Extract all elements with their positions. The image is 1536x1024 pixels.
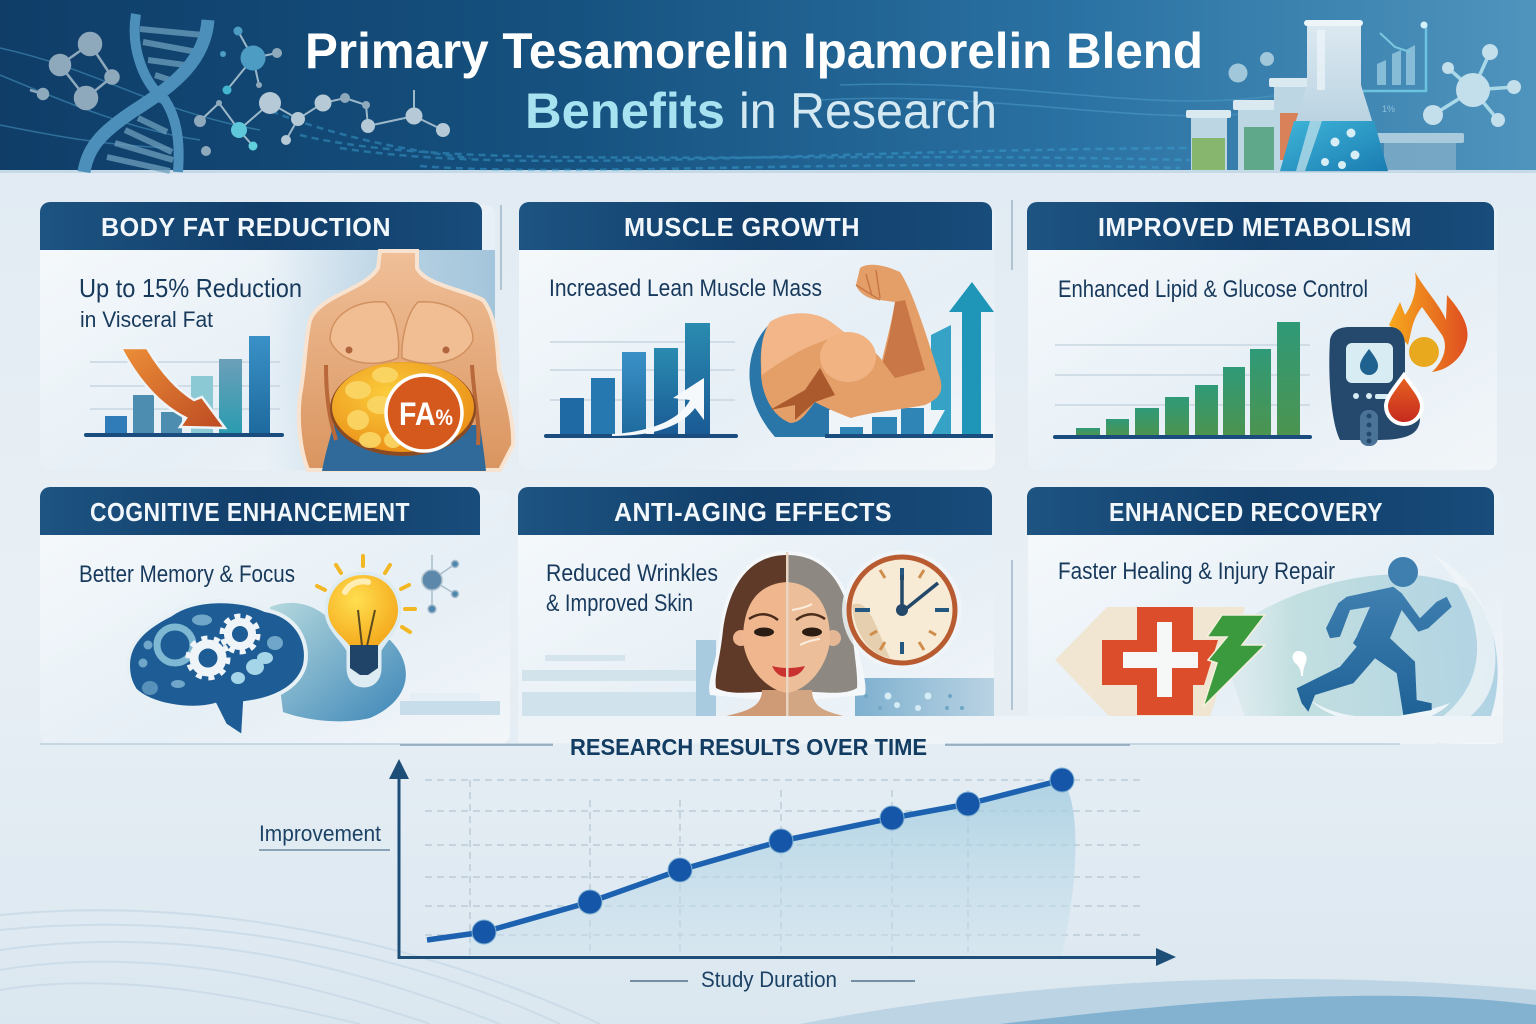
row base strip [40,716,1503,744]
icon: flexed arm [761,265,941,423]
decorative backdrop [1055,607,1245,717]
bar chart: fat [84,336,284,437]
panel: improved metabolism [1027,202,1497,470]
text: lean muscle: Increased Lean Muscle Mass [549,275,822,302]
icon: chart and molecule right: 1% [1382,104,1395,114]
icon: torso with fat: FA% [399,396,453,432]
heading: improved metabolism [1027,202,1494,250]
title: Primary Tesamorelin Ipamorelin Blend [305,23,1203,79]
heading: body fat reduction [40,202,482,250]
panel: enhanced recovery [1027,487,1503,744]
text: healing: Faster Healing & Injury Repair [1058,558,1335,585]
title [305,23,1203,139]
text: visceral fat: Up to 15% Reduction [79,273,302,303]
heading: enhanced recovery [1027,487,1494,535]
icon: face young and old [709,551,866,717]
icon: torso with fat [299,251,513,471]
heading: improved metabolism: IMPROVED METABOLISM [1098,212,1412,242]
icon: brain with gears [128,601,306,737]
icon: light bulb [317,556,415,684]
data points [472,768,1074,944]
heading: muscle growth [519,202,992,250]
y axis label: Improvement [259,821,381,846]
panel: muscle growth [519,202,995,470]
text: visceral fat [79,273,302,332]
icon: molecules left [30,26,450,156]
icon: lab glassware [1186,20,1464,172]
axes [389,759,1176,966]
heading: cognitive enhancement: COGNITIVE ENHANCEMENT [90,497,410,527]
x axis label: Study Duration [701,967,837,992]
text: wrinkles skin [546,560,718,617]
heading: cognitive enhancement [40,487,480,535]
text: memory focus: Better Memory & Focus [79,561,295,588]
text: visceral fat: in Visceral Fat [80,307,213,332]
heading: enhanced recovery: ENHANCED RECOVERY [1109,497,1383,527]
icon: small drop [1293,651,1307,676]
title: Benefits [525,83,725,139]
icon: red cross [1102,607,1218,715]
arrow: white up [612,378,704,436]
stepped background [522,640,994,716]
icon: glucose meter and flame [1329,272,1468,446]
arrow: downward [121,348,225,428]
heading: body fat reduction: BODY FAT REDUCTION [101,212,391,242]
icon: lightning bolt [1203,615,1265,707]
data line [427,780,1062,940]
icon: white cross [1123,622,1198,697]
area fill [470,780,1076,955]
divider lines [501,200,1012,710]
text: wrinkles skin: Reduced Wrinkles [546,560,718,587]
text: wrinkles skin: & Improved Skin [546,590,693,617]
bar chart: muscle [544,323,738,438]
text: lipid glucose: Enhanced Lipid & Glucose Control [1058,276,1368,303]
bar chart: rising arrow [749,282,994,438]
icon: chart and molecule right [1228,22,1521,127]
icon: small molecule [422,555,458,613]
panel: body fat reduction [40,202,513,471]
title: in Research [739,83,997,139]
header banner [0,0,1536,173]
wave dots [260,107,1190,170]
icon: runner [1297,557,1452,715]
swoosh behind bulb [270,603,406,721]
icon: DNA helix [84,14,208,172]
panel: anti-aging effects [518,487,994,744]
line chart: improvement over time [259,759,1176,992]
heading: anti-aging effects [518,487,992,535]
panel: cognitive enhancement [40,487,510,744]
decorative dots [864,692,964,711]
section heading: research results: RESEARCH RESULTS OVER TIME [570,734,927,760]
icon: clock [842,550,962,670]
heading: muscle growth: MUSCLE GROWTH [624,212,860,242]
bar chart: metabolism [1053,322,1312,439]
background waves [0,910,1536,1024]
heading: anti-aging effects: ANTI-AGING EFFECTS [614,497,892,527]
